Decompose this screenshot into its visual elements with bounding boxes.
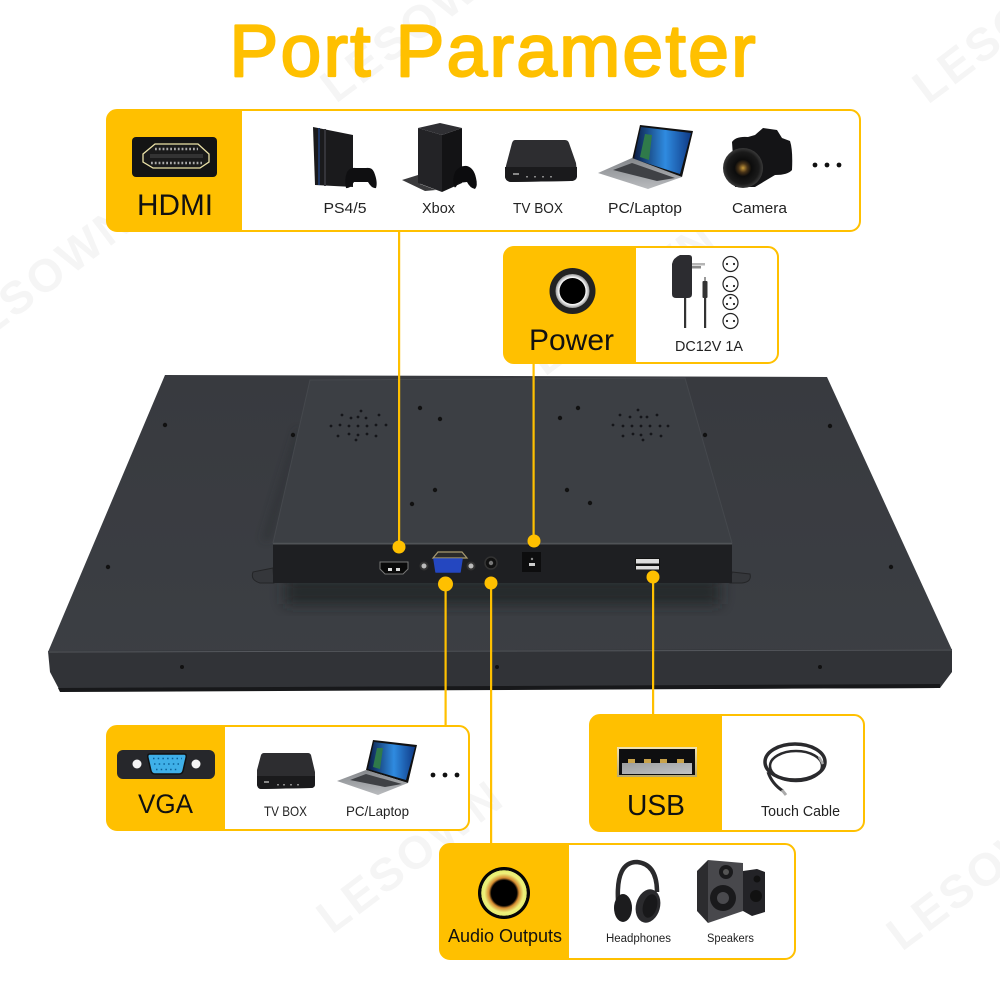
icon: TV box — [505, 140, 577, 182]
port: HDMI — [380, 562, 408, 574]
connector line: HDMI — [392, 231, 406, 554]
icon: plug standards — [723, 256, 738, 328]
mount box front — [273, 543, 732, 583]
heading: USB: USB — [627, 790, 685, 822]
icon: laptop — [598, 125, 693, 189]
panel: HDMI — [107, 110, 860, 231]
label: PS4/5: PS4/5 — [324, 200, 366, 217]
port: VGA — [420, 552, 474, 572]
connector line: Audio — [484, 576, 498, 844]
monitor side edge — [48, 649, 952, 691]
monitor back surface — [48, 375, 952, 691]
icon: PS4 — [313, 127, 377, 188]
icon: power adapter — [672, 255, 708, 328]
icon: headphones — [614, 862, 664, 926]
label: DC12V 1A: DC12V 1A — [675, 339, 743, 355]
heading: Audio Outputs: Audio Outputs — [448, 926, 562, 946]
panel: VGA — [107, 726, 469, 830]
icon: USB port — [617, 747, 697, 777]
icon: speakers — [697, 860, 765, 923]
panel: Power — [504, 247, 778, 363]
panel: Audio Outputs — [440, 844, 795, 959]
icon: more dots — [431, 773, 459, 777]
icon: camera — [723, 128, 792, 188]
icon: Xbox — [402, 123, 477, 192]
monitor rear view — [48, 375, 952, 692]
connector line: USB — [646, 570, 660, 715]
label: PC/Laptop: PC/Laptop — [608, 200, 682, 217]
label: Speakers: Speakers — [707, 933, 754, 945]
icon: TV box — [257, 753, 315, 789]
screws — [106, 406, 893, 669]
label: Touch Cable: Touch Cable — [761, 804, 840, 820]
heading: HDMI: HDMI — [137, 189, 213, 222]
heading: Power: Power — [529, 324, 614, 357]
shadow beside box — [262, 430, 302, 540]
label: TV BOX: TV BOX — [513, 200, 563, 217]
port: USB — [635, 558, 660, 570]
icon: VGA connector — [117, 750, 215, 779]
connector line: Power — [528, 363, 540, 548]
label: Headphones: Headphones — [606, 933, 671, 945]
title: Port Parameter — [230, 11, 756, 92]
icon: HDMI connector — [132, 137, 217, 177]
connector line: VGA — [438, 576, 453, 726]
watermarks: LESOWN — [520, 211, 727, 385]
label: Xbox: Xbox — [422, 200, 455, 217]
icon: more dots — [813, 163, 841, 167]
icon: laptop — [337, 740, 417, 795]
icon: audio jack — [478, 867, 530, 919]
watermarks: LESOWN — [307, 769, 514, 943]
label: TV BOX: TV BOX — [264, 803, 308, 819]
label: PC/Laptop: PC/Laptop — [346, 803, 409, 819]
label: Camera: Camera — [732, 200, 788, 217]
shadow under box — [285, 580, 720, 604]
panel: USB — [590, 715, 864, 831]
speaker holes right — [612, 409, 669, 441]
port: power — [522, 552, 541, 572]
icon: power jack — [550, 268, 596, 314]
port: audio — [485, 557, 497, 569]
mount box top — [273, 378, 732, 543]
heading: VGA: VGA — [138, 789, 193, 819]
icon: touch cable — [765, 744, 825, 795]
speaker holes left — [330, 410, 387, 441]
mounting brackets — [252, 568, 274, 583]
